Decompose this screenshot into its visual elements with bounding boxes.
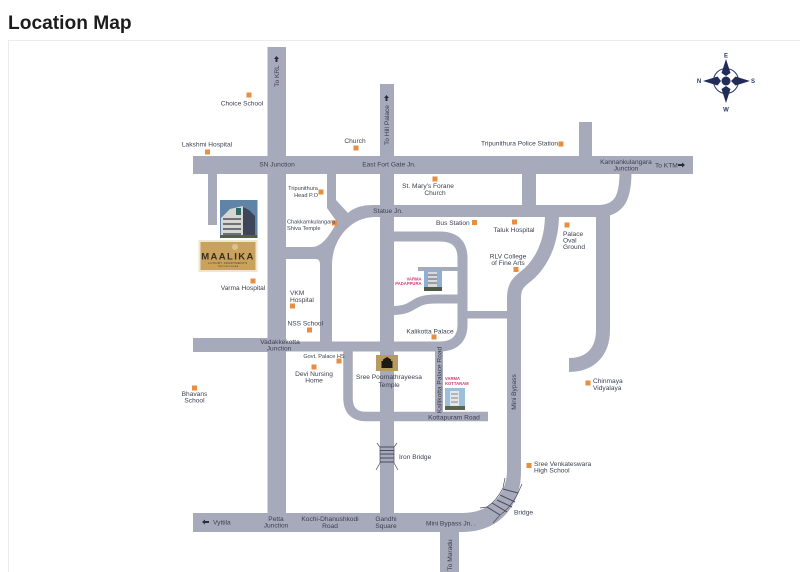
- place labels: Vidyalaya: [593, 385, 622, 392]
- place labels: Ground: [563, 244, 585, 251]
- compass: S: [751, 79, 755, 85]
- place labels: Varma Hospital: [221, 285, 266, 292]
- place labels: Iron Bridge: [399, 454, 432, 461]
- logo: Maalika: LUXURY APARTMENTS: [208, 261, 248, 265]
- place labels: RLV College: [490, 254, 527, 260]
- place labels: Lakshmi Hospital: [182, 142, 233, 148]
- place labels: Chakkamkulangara: [287, 220, 336, 226]
- place labels: Vyttila: [213, 520, 231, 526]
- photo: Varma Kottaram building: [445, 388, 465, 410]
- place labels: Devi Nursing: [295, 371, 333, 378]
- place labels: Church: [344, 138, 366, 145]
- place labels: Choice School: [221, 100, 264, 108]
- place labels: Bridge: [514, 510, 533, 516]
- logo: Maalika: MAALIKA: [201, 252, 255, 262]
- place labels: Mini Bypass: [511, 374, 518, 410]
- place labels: SN Junction: [259, 162, 295, 168]
- place labels: Square: [375, 523, 397, 530]
- place labels: Chinmaya: [593, 378, 623, 385]
- place labels: To Hill Palace: [384, 105, 391, 145]
- label: Varma Padappura: PADAPPURA: [395, 281, 422, 286]
- place labels: Vadakkekotta: [260, 339, 300, 346]
- photo: Varma Padappura building: [424, 270, 442, 291]
- label: Varma Padappura: [395, 276, 422, 286]
- label: Varma Kottaram: KOTTARAM: [445, 381, 469, 386]
- icon: temple: [376, 355, 398, 371]
- place labels: Kochi-Dhanushkodi: [301, 516, 359, 523]
- place labels: [182, 65, 678, 571]
- iron bridge: [376, 443, 398, 470]
- place labels: School: [184, 398, 205, 404]
- place labels: Tripunithura Police Station: [481, 140, 558, 148]
- compass: [697, 54, 755, 114]
- title: Location Map: [8, 13, 132, 34]
- place labels: Junction: [614, 166, 639, 172]
- place labels: NSS School: [288, 320, 324, 328]
- place labels: Church: [424, 190, 446, 197]
- label: Varma Kottaram: [445, 376, 469, 386]
- place labels: Kallikotta Palace Road: [436, 346, 444, 413]
- place labels: Petta: [268, 516, 284, 523]
- place labels: Head P.O: [294, 193, 319, 199]
- compass: E: [724, 54, 728, 60]
- place labels: To KTM: [655, 162, 678, 170]
- place labels: Mini Bypass Jn. .: [426, 520, 476, 528]
- direction arrows: [202, 56, 685, 524]
- place labels: Shiva Temple: [287, 226, 320, 232]
- place labels: To Maradu: [447, 539, 454, 571]
- place labels: St. Mary's Forane: [402, 183, 454, 190]
- place labels: Junction: [264, 522, 289, 530]
- photo: Maalika building: [220, 200, 258, 238]
- place labels: Gandhi: [375, 516, 397, 523]
- place labels: East Fort Gate Jn.: [362, 162, 416, 168]
- place labels: Bhavans: [182, 391, 208, 398]
- place labels: Govt. Palace HS: [303, 354, 345, 360]
- place labels: High School: [534, 468, 570, 474]
- compass: W: [723, 108, 729, 114]
- place labels: Statue Jn.: [373, 208, 403, 215]
- place labels: Taluk Hospital: [493, 227, 535, 234]
- place labels: Junction: [267, 346, 292, 352]
- place labels: Oval: [563, 238, 577, 244]
- label: Varma Kottaram: VARMA: [445, 376, 460, 381]
- logo: Maalika: TRIPUNITHURA: [217, 265, 239, 268]
- place labels: of Fine Arts: [491, 260, 525, 267]
- place labels: Sree Venkateswara: [534, 461, 592, 468]
- place labels: Tripunithura: [288, 186, 319, 192]
- place labels: Bus Station: [436, 220, 470, 227]
- road network: [193, 47, 693, 572]
- place labels: Home: [305, 378, 323, 384]
- place labels: Palace: [563, 231, 583, 238]
- place labels: Kalikotta Palace: [406, 328, 454, 336]
- place labels: Sree Poornathrayeesa: [356, 374, 422, 381]
- place labels: VKM: [290, 290, 304, 297]
- label: Varma Padappura: VARMA: [406, 276, 422, 282]
- place labels: Kannankulangara: [600, 159, 652, 166]
- mini bypass bridge: [480, 478, 522, 523]
- place labels: To KRL: [274, 65, 281, 87]
- place labels: Hospital: [290, 297, 314, 304]
- place labels: Road: [322, 523, 338, 530]
- compass: N: [697, 79, 701, 85]
- place labels: Kottapuram Road: [428, 414, 480, 422]
- place markers: [192, 92, 590, 468]
- place labels: Temple: [378, 382, 400, 389]
- logo: Maalika: [198, 240, 258, 272]
